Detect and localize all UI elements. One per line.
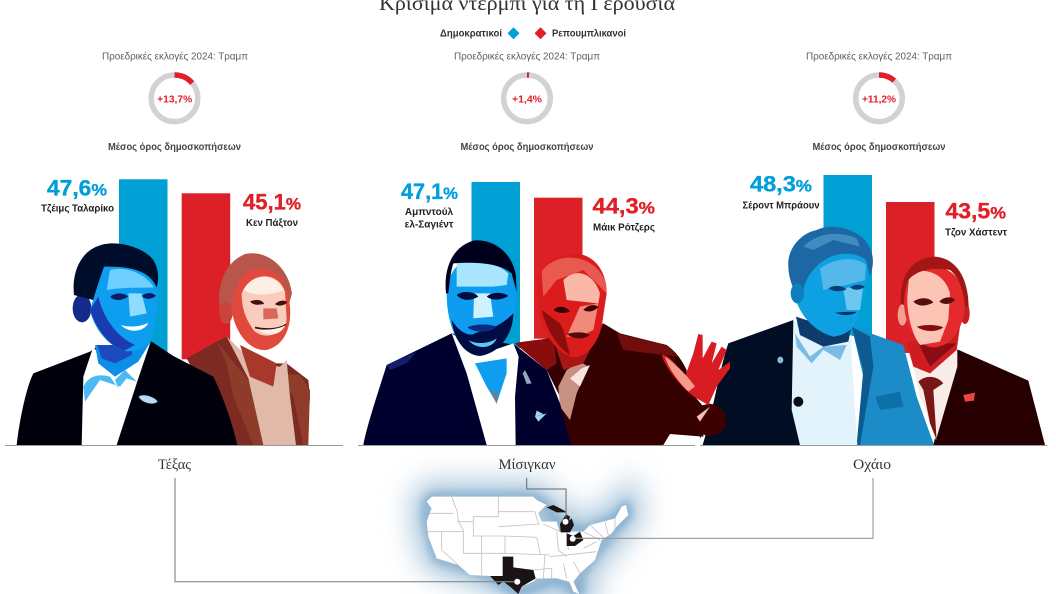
value: Talarico 47.6%: 47,6%: [47, 176, 107, 201]
portrait: Mike Rogers (body): [515, 253, 703, 445]
value labels: Texas: [41, 176, 301, 229]
portraits: Texas: [17, 243, 310, 445]
value: El-Sayed 47.1%: 47,1%: [401, 179, 458, 204]
marker: Ohio: [570, 536, 576, 542]
name: Talarico: Τζέιμς Ταλαρίκο: [41, 204, 114, 215]
value labels: Ohio: [742, 172, 1008, 239]
state label: Michigan: Μίσιγκαν: [498, 457, 556, 473]
bar chart: Texas: [119, 179, 230, 359]
map wide glow: [427, 497, 628, 594]
value: Husted 43.5%: 43,5%: [946, 198, 1006, 223]
donut: Michigan +1.4%: [504, 75, 550, 122]
map state borders: [427, 497, 615, 578]
donut: Ohio +11.2%: [856, 75, 902, 122]
value: Rogers 44.3%: 44,3%: [592, 193, 655, 218]
legend: [440, 27, 626, 40]
presidential result label: Ohio: Προεδρικές εκλογές 2024: Τραμπ: [806, 50, 952, 62]
portrait: Sherrod Brown: [703, 227, 934, 445]
portrait: Mike Rogers (raised hand): [662, 334, 730, 438]
bar chart: Michigan: [472, 182, 582, 348]
map: United States: [427, 497, 628, 594]
donut: Ohio +11.2%: +11,2%: [862, 94, 896, 106]
donut: Texas +13.7%: +13,7%: [157, 94, 192, 106]
legend: Democrats label: Δημοκρατικοί: [440, 28, 502, 40]
baseline: Michigan: [358, 445, 695, 446]
value: Brown 48.3%: 48,3%: [750, 172, 812, 197]
panel: Ohio header: [806, 50, 952, 153]
marker: Michigan: [562, 519, 568, 525]
state label: Texas: Τέξας: [158, 457, 191, 473]
portrait: Ken Paxton: [187, 253, 310, 445]
portrait: Jon Husted: [898, 257, 1045, 445]
legend: Republicans label: Ρεπουμπλικανοί: [552, 28, 626, 40]
state highlight: Texas: [490, 557, 536, 594]
name: El-Sayed: Αμπντούλ: [405, 207, 454, 218]
state highlight: Michigan: [547, 505, 574, 532]
leader line: Michigan: [527, 478, 566, 522]
donut: Michigan +1.4%: +1,4%: [512, 94, 542, 106]
name: Rogers: Μάικ Ρότζερς: [593, 223, 655, 234]
map coastal glow: [427, 497, 628, 594]
value: Paxton 45.1%: 45,1%: [243, 189, 301, 214]
map land: [427, 497, 628, 594]
name: Paxton: Κεν Πάξτον: [246, 218, 298, 229]
panel: Texas header: [102, 50, 248, 153]
name: Brown: Σέροντ Μπράουν: [742, 200, 820, 211]
poll average label: Michigan: Μέσος όρος δημοσκοπήσεων: [460, 142, 594, 153]
name: Husted: Τζον Χάστεντ: [945, 228, 1008, 239]
presidential result label: Michigan: Προεδρικές εκλογές 2024: Τραμπ: [454, 50, 600, 62]
presidential result label: Texas: Προεδρικές εκλογές 2024: Τραμπ: [102, 50, 248, 62]
portrait: Abdul El-Sayed: [363, 240, 571, 445]
baseline: Texas: [5, 445, 343, 446]
legend: Republicans diamond: [534, 27, 546, 39]
poll average label: Texas: Μέσος όρος δημοσκοπήσεων: [108, 142, 241, 153]
leader line: Ohio: [573, 478, 873, 538]
legend: Democrats diamond: [508, 27, 520, 39]
name: El-Sayed: ελ-Σαγιέντ: [405, 220, 454, 231]
value labels: Michigan: [401, 179, 655, 234]
donut: Texas +13.7%: [151, 75, 198, 122]
baseline: Ohio: [700, 445, 1047, 446]
panel: Michigan header: [454, 50, 600, 153]
state label: Ohio: Οχάιο: [853, 457, 891, 473]
bar chart: Ohio: [824, 175, 934, 353]
portrait: James Talarico: [17, 243, 237, 445]
marker: Texas: [514, 579, 520, 585]
poll average label: Ohio: Μέσος όρος δημοσκοπήσεων: [812, 142, 946, 153]
state highlight: Ohio: [567, 532, 583, 546]
leader line: Texas: [175, 478, 517, 582]
